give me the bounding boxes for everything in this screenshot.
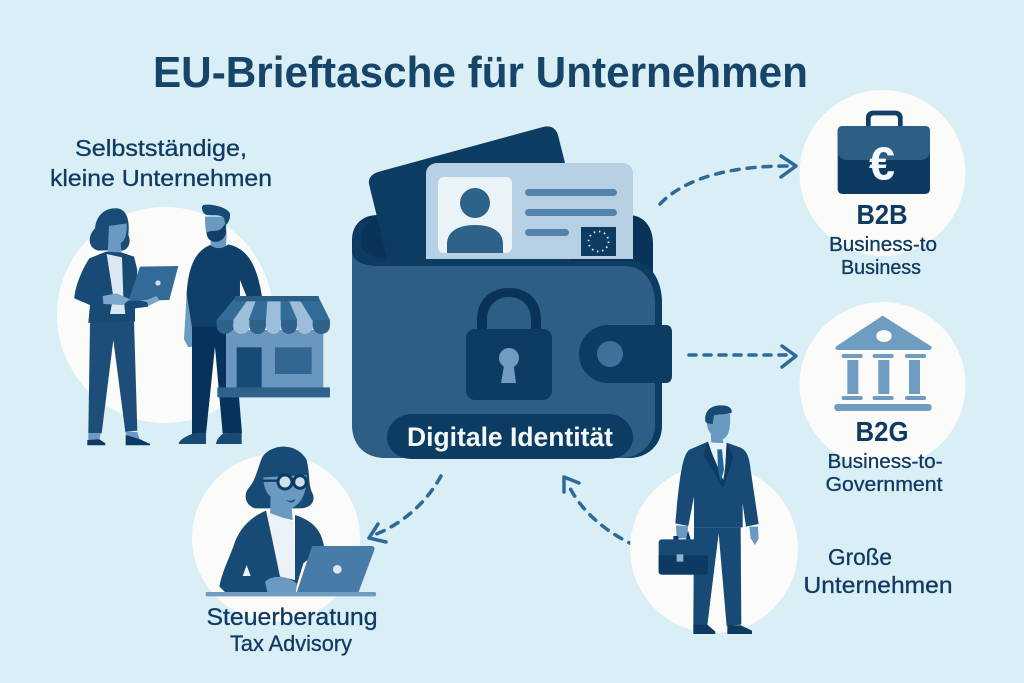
panel: B2G [800, 302, 966, 496]
arrow: wallet to tax advisory [369, 476, 441, 542]
title: EU-Brieftasche für Unternehmen [153, 48, 808, 97]
ID card [426, 163, 633, 259]
B2G description: Business-to- [828, 451, 942, 473]
B2G description [826, 451, 943, 496]
label: Große Unternehmen: Unternehmen [804, 572, 952, 598]
panel: self-employed and small businesses [50, 135, 330, 445]
icon: briefcase with euro [838, 111, 930, 194]
illustration: shop [217, 296, 330, 397]
heading: self-employed: Selbstständige, [75, 135, 247, 161]
B2B label: B2B [856, 199, 908, 230]
label: Digitale Identität: Digitale Identität [407, 422, 613, 452]
illustration: man with beard [179, 205, 262, 444]
wallet back [352, 215, 653, 290]
illustration: woman with laptop [74, 208, 178, 445]
label: Steuerberatung: Tax Advisory [230, 631, 352, 656]
label: Große Unternehmen: Große [828, 544, 892, 570]
panel: large enterprises [630, 405, 952, 634]
icon: government building [834, 316, 932, 411]
B2B description: Business-to [829, 234, 937, 256]
panel: tax advisory [192, 447, 378, 656]
arrow: wallet to B2G [689, 346, 796, 367]
heading: self-employed: kleine Unternehmen [50, 165, 272, 191]
label: Digitale Identität [387, 414, 633, 459]
arrow: large enterprises to wallet [564, 477, 636, 546]
wallet body [352, 250, 662, 458]
illustration: businessman with briefcase [659, 405, 759, 634]
EU flag [581, 227, 616, 256]
back card [369, 126, 570, 262]
icon: briefcase with euro: € [869, 137, 895, 189]
wallet clasp [579, 325, 672, 383]
padlock [466, 288, 552, 400]
label: Steuerberatung: Steuerberatung [206, 604, 378, 631]
label: Große Unternehmen [804, 544, 952, 598]
arrow: wallet to B2B [660, 156, 796, 204]
B2G label: B2G [856, 416, 908, 447]
heading: self-employed [50, 135, 272, 191]
B2G description: Government [826, 474, 943, 496]
wallet [352, 126, 672, 459]
panel: B2B [800, 90, 966, 279]
illustration: tax advisor at laptop [206, 447, 376, 596]
B2B description [829, 234, 937, 279]
B2B description: Business [841, 257, 921, 279]
label: Steuerberatung [206, 604, 378, 656]
